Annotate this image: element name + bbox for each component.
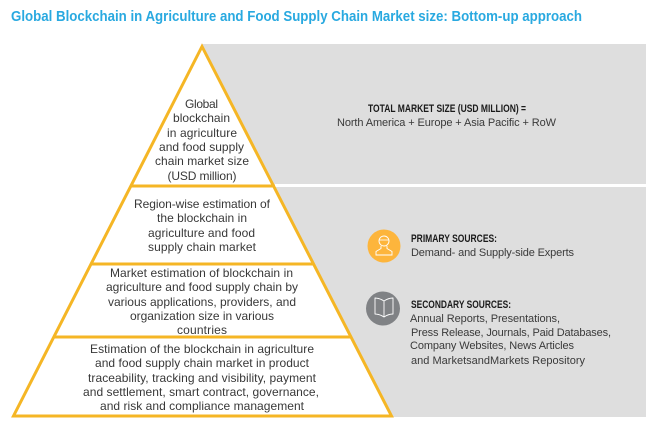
secondary sources text: SECONDARY SOURCES: [411,299,511,311]
pyramid tier 4 text: and food supply chain market in product [95,356,310,370]
secondary sources text: Annual Reports, Presentations, [410,313,560,325]
pyramid tier 2 text: agriculture and food [148,226,255,240]
icon: primary sources person [368,230,400,262]
pyramid tier 1 text: and food supply [159,140,244,154]
primary sources text: PRIMARY SOURCES: [411,233,497,245]
pyramid tier 1 text: chain market size [155,154,249,168]
secondary sources text: and MarketsandMarkets Repository [411,355,586,367]
pyramid tier 1 text: in agriculture [167,126,237,140]
pyramid tier 4 text: traceability, tracking and visibility, payment [88,371,317,385]
total market size text: TOTAL MARKET SIZE (USD MILLION) = [368,103,526,115]
total market size text: North America + Europe + Asia Pacific + RoW [337,117,557,129]
pyramid tier 4 text: and risk and compliance management [100,399,305,413]
pyramid tier 3 text: various applications, providers, and [108,295,296,309]
pyramid tier 3 text: organization size in various [130,309,274,323]
pyramid tier 3 text: Market estimation of blockchain in [110,266,293,280]
pyramid tier 1 text [155,97,249,183]
pyramid [14,46,392,416]
pyramid tier 4 text: and settlement, smart contract, governance, [83,385,319,399]
pyramid tier 4 text [83,342,319,413]
pyramid tier 4 text: Estimation of the blockchain in agriculture [90,342,314,356]
primary sources text: Demand- and Supply-side Experts [411,247,574,259]
pyramid tier 3 text [106,266,298,337]
primary sources text [411,233,574,259]
pyramid tier 1 text: Global [185,97,218,111]
secondary sources text: Press Release, Journals, Paid Databases, [411,327,611,339]
pyramid tier 3 text: agriculture and food supply chain by [106,280,298,294]
pyramid tier 2 text: Region-wise estimation of [134,197,271,211]
secondary sources text [410,299,611,367]
panel: sources background [270,187,646,417]
icon: secondary sources book [366,292,400,326]
pyramid tier 1 text: blockchain [173,111,230,125]
panel: total market size background [202,44,646,184]
total market size text [337,103,557,129]
pyramid tier 1 text: (USD million) [168,169,236,183]
pyramid tier 3 text: countries [177,323,227,337]
pyramid tier 2 text [134,197,271,254]
pyramid tier 2 text: supply chain market [148,240,257,254]
title: Global Blockchain in Agriculture and Food Supply Chain Market size: Bottom-up approach [11,9,582,25]
secondary sources text: Company Websites, News Articles [410,340,574,352]
pyramid tier 2 text: the blockchain in [157,211,247,225]
